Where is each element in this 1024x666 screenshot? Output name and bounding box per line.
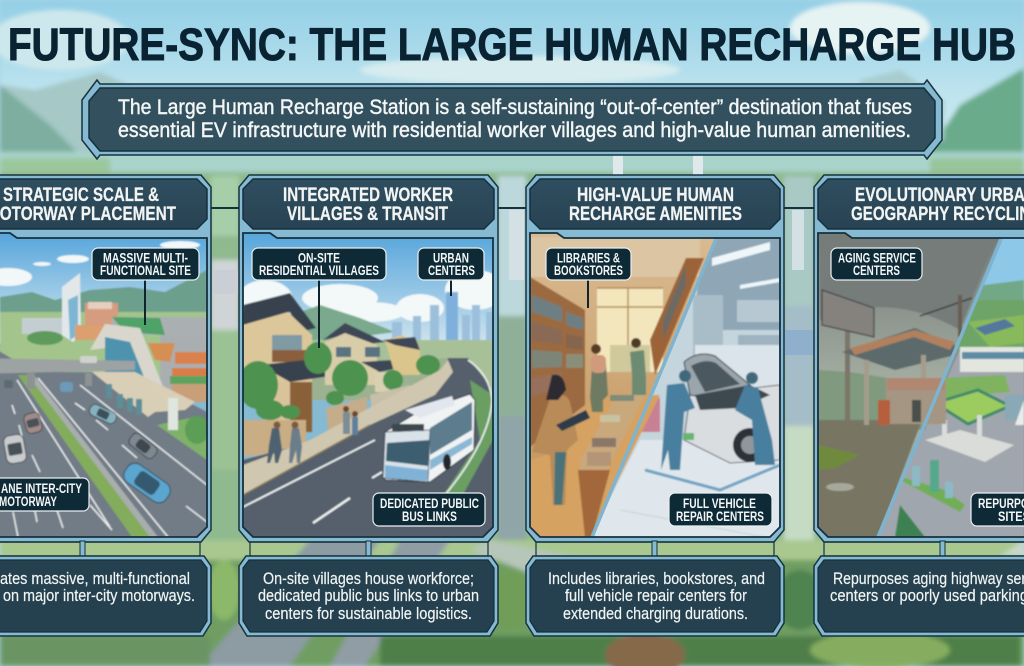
callout: residential villages: RESIDENTIAL VILLAGES [259, 263, 379, 278]
recycled site illustration [818, 233, 1024, 537]
houses [243, 293, 316, 332]
callout: aging centers [831, 248, 922, 280]
callout: repair centers: REPAIR CENTERS [676, 509, 764, 524]
panel: evolutionary urban geography [814, 175, 1024, 542]
panel frame [239, 175, 498, 542]
callout: libraries: BOOKSTORES [554, 263, 623, 278]
walls [243, 420, 306, 456]
renewed side [923, 349, 1024, 536]
connector stems [0, 541, 1024, 558]
diagonal divider [592, 237, 717, 537]
panel frame [526, 175, 784, 542]
intro text: essential EV infrastructure with residential worker villages and high-value human amenities. [118, 119, 911, 142]
panel: integrated worker villages [237, 175, 505, 542]
book table [580, 394, 644, 470]
readers [532, 395, 578, 505]
callout: bus links [373, 493, 485, 526]
text box 1: ates massive, multi-functional [0, 570, 190, 588]
callout: massive site [92, 248, 199, 325]
callout: motorway [0, 478, 89, 511]
text box 1 [0, 556, 211, 636]
library and repair illustration [530, 233, 785, 540]
panel: strategic scale [0, 175, 220, 542]
panel heading [818, 179, 1024, 229]
callout: repurposed sites [971, 493, 1024, 526]
connector lines between panels [211, 207, 814, 209]
panel heading: INTEGRATED WORKER [283, 185, 453, 206]
callout: motorway: ANE INTER-CITY [1, 481, 82, 496]
callout: urban centers: CENTERS [428, 263, 475, 278]
callout: aging centers: AGING SERVICE [838, 250, 916, 266]
text box 2: centers for sustainable logistics. [265, 605, 472, 623]
callout: aging centers: CENTERS [853, 263, 900, 278]
repair side [608, 282, 780, 504]
callout: libraries [546, 248, 631, 308]
panel heading [530, 179, 780, 229]
panel heading: RECHARGE AMENITIES [569, 204, 742, 225]
car [684, 385, 780, 463]
bus [383, 394, 475, 482]
text box 3 [526, 556, 784, 636]
text box 2: On-site villages house workforce; [263, 570, 474, 588]
text box 2 [239, 556, 498, 636]
callout: motorway: MOTORWAY [0, 494, 57, 509]
callout: massive site: MASSIVE MULTI- [103, 250, 188, 266]
mechanics [661, 383, 695, 470]
callout: libraries: LIBRARIES & [557, 250, 620, 266]
panel frame [814, 175, 1024, 542]
text box 1: on major inter-city motorways. [3, 587, 195, 605]
text box 3: extended charging durations. [563, 605, 748, 623]
panel heading [243, 179, 494, 229]
callout: repair centers [669, 493, 772, 526]
motorway illustration [0, 233, 220, 537]
callout: massive site: FUNCTIONAL SITE [100, 263, 191, 278]
village and bus illustration [237, 233, 505, 537]
diagonal divider [878, 237, 1002, 537]
panel frame [0, 175, 211, 542]
callout: urban centers: URBAN [433, 250, 469, 266]
panel heading [0, 179, 207, 229]
panel heading: HIGH-VALUE HUMAN [577, 185, 734, 206]
intro text: The Large Human Recharge Station is a self-sustaining “out-of-center” destination that fuses [118, 96, 912, 119]
text box 4 [814, 556, 1024, 636]
callout: residential villages [252, 248, 386, 348]
trees [238, 342, 440, 420]
cars [3, 356, 174, 506]
aged side [819, 234, 1000, 486]
panel heading: VILLAGES & TRANSIT [287, 204, 448, 225]
text box 3: full vehicle repair centers for [565, 587, 747, 605]
panel heading: STRATEGIC SCALE & [3, 185, 159, 206]
callout: urban centers [418, 248, 484, 296]
panel: intro banner [82, 80, 942, 159]
panel: human recharge amenities [526, 175, 785, 542]
people [267, 406, 358, 463]
road [243, 358, 493, 537]
callout: bus links: BUS LINKS [402, 509, 457, 524]
intro text [118, 96, 912, 142]
background towers [213, 155, 814, 355]
text box 2: dedicated public bus links to urban [258, 587, 479, 605]
callout: repair centers: FULL VEHICLE [683, 496, 756, 511]
library side [530, 233, 717, 537]
text box 3: Includes libraries, bookstores, and [548, 570, 765, 588]
callout: bus links: DEDICATED PUBLIC [380, 496, 479, 511]
callout: residential villages: ON-SITE [298, 250, 340, 266]
